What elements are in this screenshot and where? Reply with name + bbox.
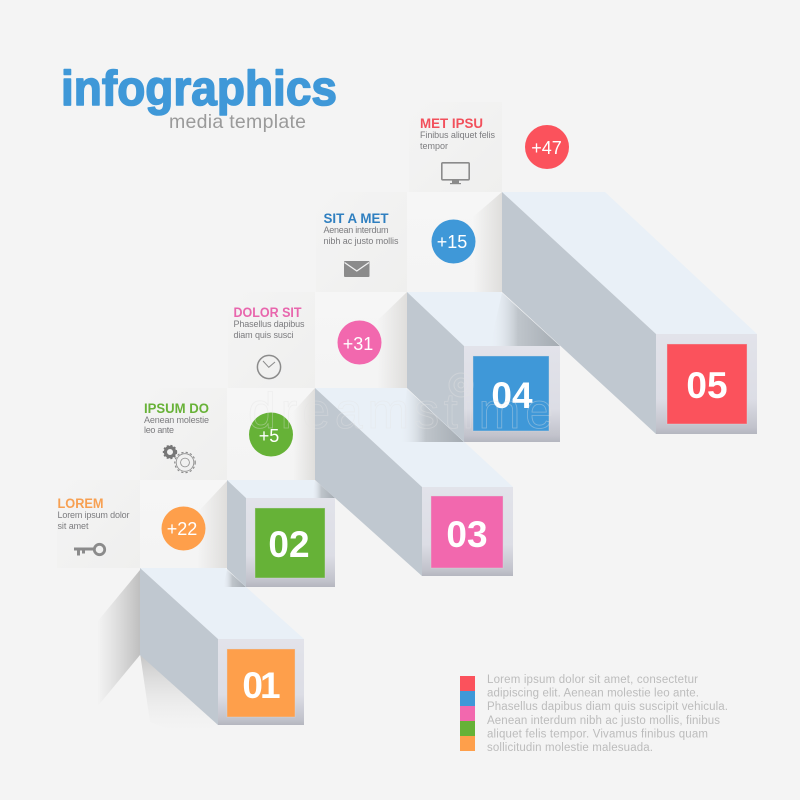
circle: +31 [338,320,382,364]
legend: paragraph [487,674,728,754]
text: sit a met body: Aenean interdum [324,225,388,235]
text: lorem body [58,510,130,531]
shadow: block 03 on block 02 [312,480,335,498]
legend: paragraph: aliquet felis tempor. Vivamus finibus quam [487,728,708,740]
panel: step 05 text [409,102,502,192]
panel: step 04 [316,192,502,292]
number: 01: 01 [242,665,280,706]
number: 02: 02 [268,524,310,565]
block 03 [315,388,513,576]
panel: step 02 [140,388,315,480]
circle: +15: +15 [437,232,467,252]
text: met ipsu body: Finibus aliquet felis [420,130,496,140]
text: ipsum do body [144,415,209,435]
shadow: floor under block 01 [140,653,218,738]
panel: step 01 [57,480,227,568]
shadow: wall left of block 01 [97,570,140,707]
panel: step 03 [228,292,407,388]
watermark: dreamstime [248,383,553,439]
icon: gears [164,446,195,473]
heading: ipsum do: IPSUM DO [144,401,209,416]
text: lorem body: Lorem ipsum dolor [58,510,130,520]
block 01 [140,568,304,725]
text: met ipsu body: tempor [420,141,448,151]
text: sit a met body [324,225,399,246]
text: ipsum do body: Aenean molestie [144,415,209,425]
heading: lorem: LOREM [58,496,104,511]
heading: dolor sit: DOLOR SIT [234,305,302,320]
title: infographics [61,62,337,116]
number: 03: 03 [446,514,488,555]
text: dolor sit body [234,319,305,340]
circle: +47: +47 [531,138,562,158]
legend: paragraph: Aenean interdum nibh ac justo mollis, finibus [487,715,720,727]
block 04 [407,292,560,442]
block 02 [227,480,335,587]
shadow: block 05 on block 04 [490,293,560,346]
text: lorem body: sit amet [58,521,89,531]
circle: +22 [162,506,206,550]
circle: +31: +31 [343,334,373,354]
legend: paragraph: adipiscing elit. Aenean molestie leo ante. [487,688,699,700]
legend: paragraph: Phasellus dapibus diam quis suscipit vehicula. [487,701,728,713]
text: ipsum do body: leo ante [144,425,174,435]
text: sit a met body: nibh ac justo mollis [324,236,399,246]
heading: sit a met: SIT A MET [324,211,389,226]
icon: key [74,544,105,556]
icon: mail [344,261,370,277]
title: media template [169,111,306,133]
number: 05: 05 [686,365,728,406]
legend: paragraph: Lorem ipsum dolor sit amet, consectetur [487,674,698,686]
legend: colour swatches [460,676,475,751]
circle: +47 [525,125,569,169]
circle: +22: +22 [167,519,197,539]
text: dolor sit body: diam quis susci [234,330,294,340]
heading: met ipsu: MET IPSU [420,116,483,131]
circle: +5: +5 [259,426,279,446]
shadow: block 02 on block 01 [223,570,246,587]
icon: clock [257,355,281,379]
block 05 [502,192,757,434]
legend: paragraph: sollicitudin molestie malesuada. [487,742,653,754]
text: dolor sit body: Phasellus dapibus [234,319,305,329]
circle: +5 [249,412,293,456]
icon: monitor [442,163,469,184]
text: met ipsu body [420,130,496,151]
circle: +15 [432,220,476,264]
shadow: block 04 on block 03 [400,389,464,442]
number: 04: 04 [491,375,533,416]
